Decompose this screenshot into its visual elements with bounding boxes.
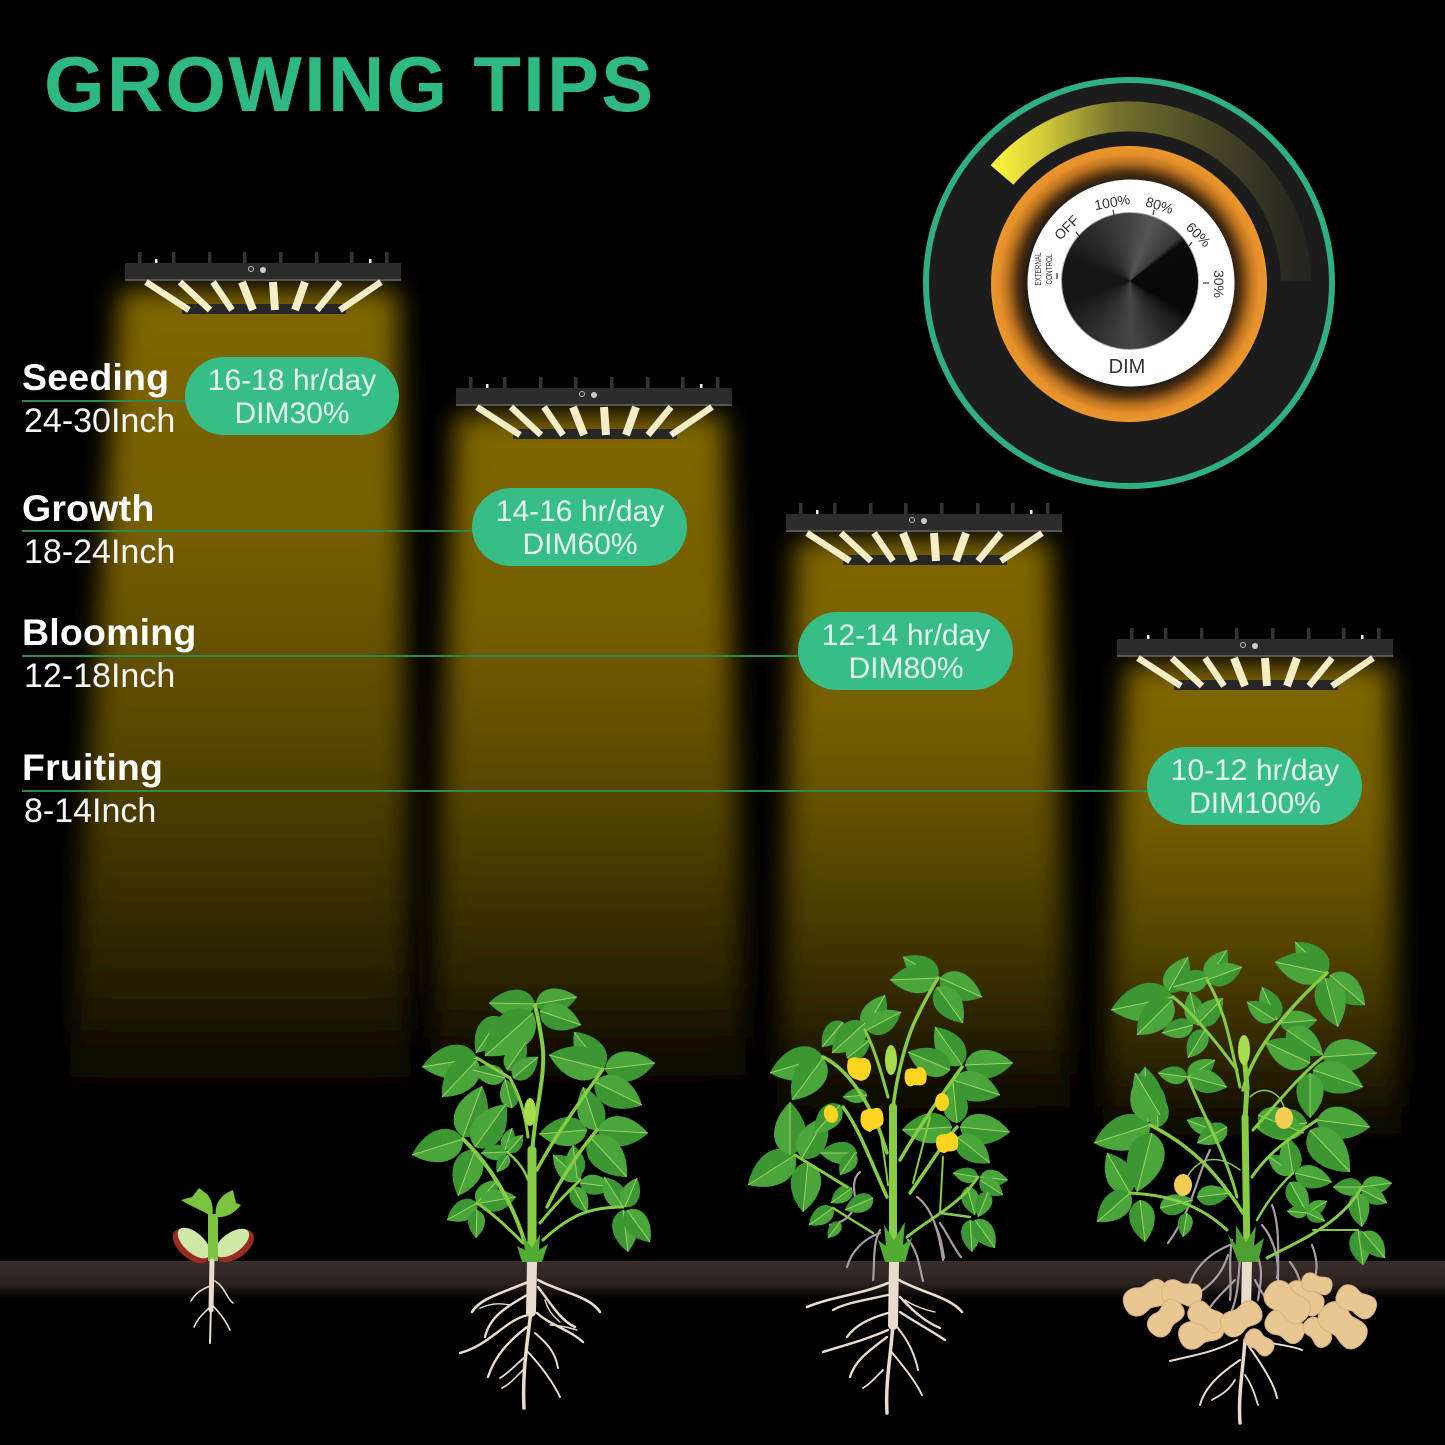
plant: growth stage <box>407 985 660 1408</box>
stage row: blooming: 12-18Inch <box>24 657 175 695</box>
fruiting stems <box>1130 973 1362 1258</box>
stage row: blooming: Blooming <box>22 611 196 653</box>
dial labels: OFF <box>1051 212 1082 243</box>
stage row: blooming: DIM80% <box>848 652 964 685</box>
stage row: seeding <box>22 356 399 440</box>
LED lamp: fruiting <box>1117 628 1393 690</box>
stage row: fruiting: 10-12 hr/day <box>1171 754 1339 787</box>
dial labels: CONTROL <box>1045 253 1054 284</box>
peanuts <box>1119 1271 1380 1359</box>
blooming calyx <box>878 1222 912 1262</box>
blooming roots <box>807 1262 962 1413</box>
soil band <box>0 1261 1445 1299</box>
dial labels: 80% <box>1144 193 1175 217</box>
stage row: seeding: Seeding <box>22 356 169 398</box>
stage row: growth: Growth <box>22 487 154 529</box>
stage row: fruiting <box>22 746 1362 830</box>
stage row: growth: 18-24Inch <box>24 533 175 571</box>
plant: seedling <box>167 1188 260 1343</box>
yellow brightness arc <box>1002 116 1296 281</box>
light beam: blooming <box>775 540 1072 1145</box>
dial outer ring <box>926 80 1332 486</box>
stage row: fruiting: 8-14Inch <box>24 792 156 830</box>
light beam: seeding <box>65 290 412 1130</box>
blooming aerial pegs <box>830 1172 961 1281</box>
blooming flowers <box>822 1057 958 1153</box>
stage row: seeding: 16-18 hr/day <box>208 364 376 397</box>
stage row: growth: DIM60% <box>522 528 638 561</box>
growth stems <box>463 1005 623 1255</box>
fruiting flowers <box>1174 1107 1293 1196</box>
stage row: fruiting: Fruiting <box>22 746 163 788</box>
dial labels: DIM <box>1109 356 1145 378</box>
fruiting roots <box>1170 1262 1302 1423</box>
dial labels <box>1034 191 1227 378</box>
dial labels: 100% <box>1093 191 1131 213</box>
blooming stems <box>795 978 978 1255</box>
stage row: blooming: 12-14 hr/day <box>822 619 990 652</box>
fruiting leaves <box>1088 932 1393 1267</box>
growth roots <box>460 1262 600 1408</box>
stage row: growth <box>22 487 687 571</box>
growth calyx <box>517 1234 548 1262</box>
fruiting calyx <box>1228 1225 1264 1262</box>
stage row: growth: 14-16 hr/day <box>496 495 664 528</box>
title: GROWING TIPS <box>44 40 655 128</box>
light beam: growth <box>428 415 748 1120</box>
metal knob <box>1061 212 1199 350</box>
dial labels: 60% <box>1183 219 1214 250</box>
LED lamp: blooming <box>786 503 1062 565</box>
stage row: seeding: DIM30% <box>234 397 350 430</box>
orange glow ring <box>991 146 1267 422</box>
white scale plate <box>1028 180 1234 386</box>
dimmer dial panel <box>923 77 1335 489</box>
stage row: seeding: 24-30Inch <box>24 402 175 440</box>
plant: fruiting stage <box>1088 932 1393 1423</box>
LED lamp: seeding <box>125 252 401 314</box>
dial labels: EXTERNAL <box>1034 252 1043 286</box>
dial labels: 30% <box>1211 270 1227 298</box>
stage row: fruiting: DIM100% <box>1189 787 1321 820</box>
light beam: fruiting <box>1100 665 1402 1165</box>
blooming leaves <box>739 946 1014 1254</box>
plant: blooming stage <box>739 946 1014 1413</box>
growth leaves <box>407 985 660 1254</box>
fruiting aerial pegs <box>1168 1150 1317 1320</box>
LED lamp: growth <box>456 377 732 439</box>
stage row: blooming <box>22 611 1013 695</box>
